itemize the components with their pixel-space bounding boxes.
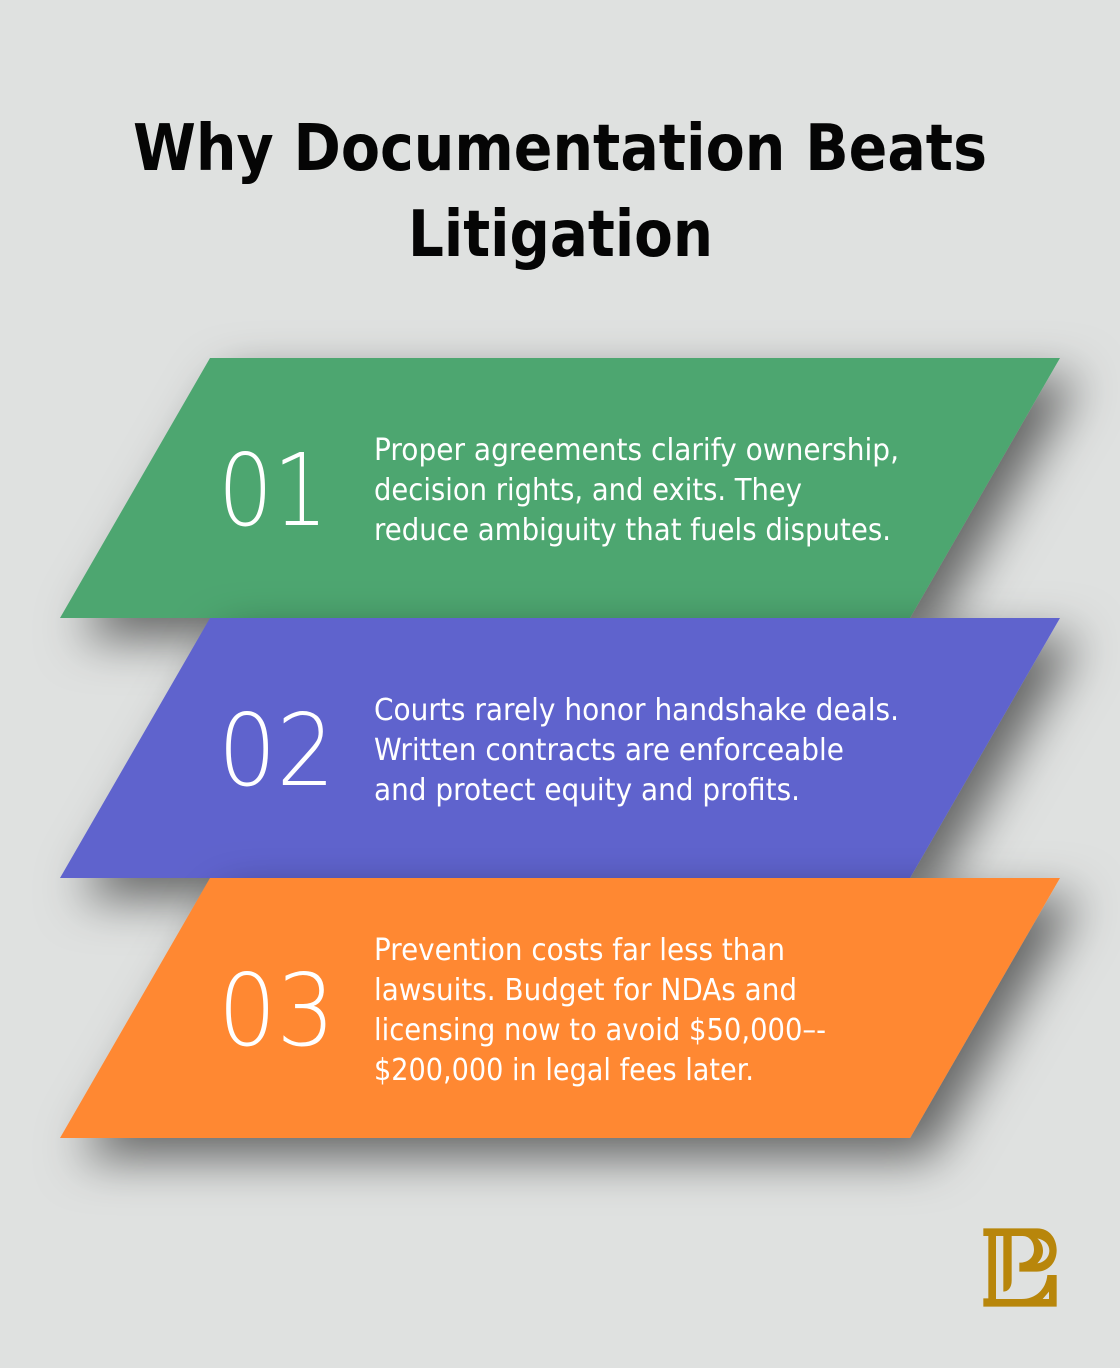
orange parallelogram bbox=[60, 878, 1060, 1138]
text: step 03 description: Prevention costs far less than bbox=[374, 933, 785, 968]
text: step 01 description bbox=[374, 433, 899, 548]
text: step 03 description: $200,000 in legal fees later. bbox=[374, 1053, 754, 1088]
text: step 03 description: licensing now to avoid $50,000–- bbox=[374, 1013, 826, 1048]
text: step 02 description: Written contracts are enforceable bbox=[374, 733, 844, 768]
green parallelogram bbox=[60, 358, 1060, 618]
icon: PL logo bbox=[983, 1228, 1057, 1307]
number 01: 01 bbox=[218, 432, 328, 549]
text: step 03 description: lawsuits. Budget for NDAs and bbox=[374, 973, 797, 1008]
text: step 02 description bbox=[374, 693, 899, 808]
text: step 02 description: Courts rarely honor handshake deals. bbox=[374, 693, 899, 728]
text: step 01 description: Proper agreements clarify ownership, bbox=[374, 433, 899, 468]
text: step 03 description bbox=[374, 933, 826, 1088]
text: step 02 description: and protect equity and profits. bbox=[374, 773, 800, 808]
text: step 01 description: decision rights, and exits. They bbox=[374, 473, 802, 508]
number 03: 03 bbox=[218, 952, 335, 1069]
title bbox=[133, 112, 987, 272]
blue parallelogram bbox=[60, 618, 1060, 878]
panel: step 02 bbox=[60, 618, 1060, 878]
number 02: 02 bbox=[218, 692, 335, 809]
text: step 01 description: reduce ambiguity that fuels disputes. bbox=[374, 513, 891, 548]
title: Why Documentation Beats bbox=[133, 112, 987, 186]
panel: step 01 bbox=[60, 358, 1060, 618]
title: Litigation bbox=[408, 198, 713, 272]
panel: step 03 bbox=[60, 878, 1060, 1138]
